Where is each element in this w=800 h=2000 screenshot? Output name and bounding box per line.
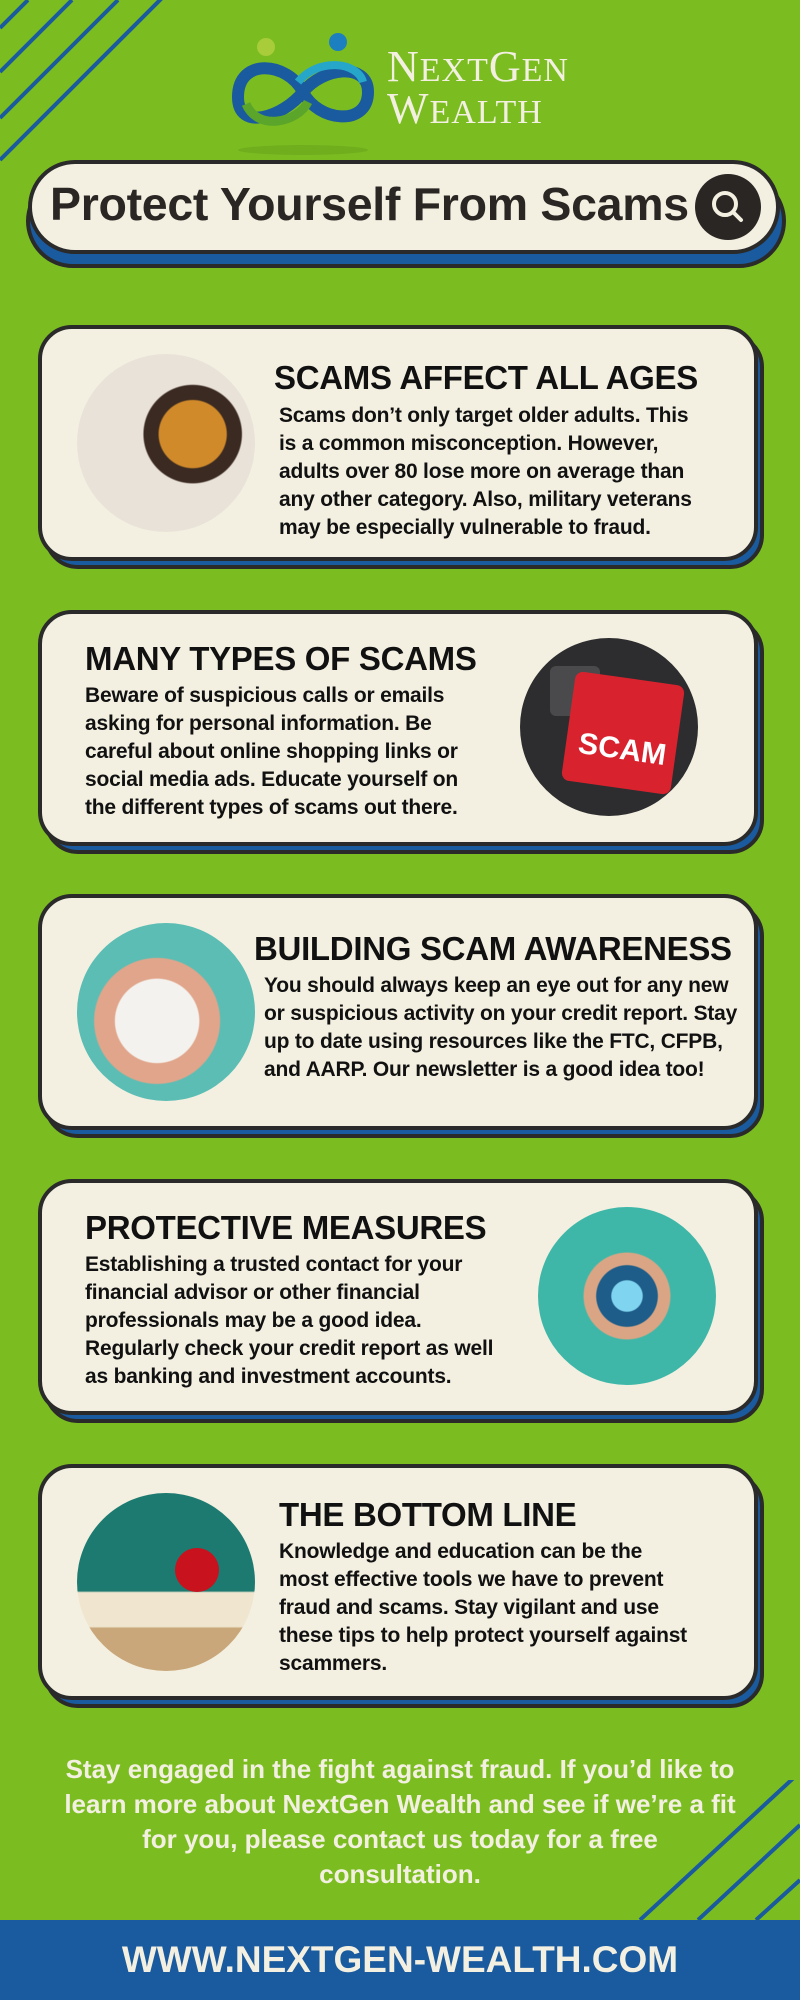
photo: hands with lock (538, 1207, 716, 1385)
title search bar (26, 160, 786, 268)
body text: most effective tools we have to prevent (279, 1568, 663, 1591)
body text: Knowledge and education can be the (279, 1540, 642, 1563)
panel: many types of scams (38, 610, 764, 854)
body text: asking for personal information. Be (85, 712, 432, 735)
body text (264, 974, 738, 1081)
photo: SCAM key (520, 638, 698, 816)
body text: careful about online shopping links or (85, 740, 458, 763)
body text: fraud and scams. Stay vigilant and use (279, 1596, 659, 1619)
title: Protect Yourself From Scams (50, 178, 689, 230)
photo: hands with head (77, 923, 255, 1101)
body text: financial advisor or other financial (85, 1281, 420, 1304)
call to action text: learn more about NextGen Wealth and see if we’re a fit (64, 1789, 736, 1819)
body text: Regularly check your credit report as well (85, 1337, 493, 1360)
body text: You should always keep an eye out for any new (264, 974, 728, 997)
icon: search (695, 174, 761, 240)
footer website band (0, 1920, 800, 2000)
icon: infinity logo (232, 33, 374, 155)
body text: as banking and investment accounts. (85, 1365, 451, 1388)
body text: or suspicious activity on your credit report. Stay (264, 1002, 737, 1025)
body text: these tips to help protect yourself against (279, 1624, 687, 1647)
body text (279, 404, 692, 539)
body text: Scams don’t only target older adults. This (279, 404, 688, 427)
body text: social media ads. Educate yourself on (85, 768, 458, 791)
call to action text: Stay engaged in the fight against fraud. If you’d like to (66, 1754, 734, 1784)
photo: SCAM key: SCAM (576, 727, 668, 772)
body text (85, 684, 458, 819)
body text: is a common misconception. However, (279, 432, 658, 455)
body text (279, 1540, 687, 1675)
logo (232, 33, 569, 155)
body text: may be especially vulnerable to fraud. (279, 516, 651, 539)
heading: SCAMS AFFECT ALL AGES (274, 359, 698, 396)
heading: THE BOTTOM LINE (279, 1496, 576, 1533)
body text: professionals may be a good idea. (85, 1309, 422, 1332)
call to action text: for you, please contact us today for a free (142, 1824, 658, 1854)
logo text: WEALTH (387, 84, 543, 133)
panel: the bottom line (38, 1464, 764, 1708)
heading: MANY TYPES OF SCAMS (85, 640, 477, 677)
decorative stripes top-left (0, 0, 163, 162)
panel: protective measures (38, 1179, 764, 1423)
body text: adults over 80 lose more on average than (279, 460, 684, 483)
photo: books and apple (77, 1493, 255, 1671)
body text: scammers. (279, 1652, 387, 1675)
call to action text: consultation. (319, 1859, 481, 1889)
photo: woman with laptop (77, 354, 255, 532)
body text: Establishing a trusted contact for your (85, 1253, 462, 1276)
body text: and AARP. Our newsletter is a good idea too! (264, 1058, 704, 1081)
body text: up to date using resources like the FTC, CFPB, (264, 1030, 723, 1053)
decorative stripes bottom-right (638, 1780, 800, 1920)
body text: any other category. Also, military veterans (279, 488, 692, 511)
body text: Beware of suspicious calls or emails (85, 684, 444, 707)
call to action text (64, 1754, 736, 1889)
body text (85, 1253, 493, 1388)
footer website band: WWW.NEXTGEN-WEALTH.COM (122, 1939, 678, 1980)
panel: building scam awareness (38, 894, 764, 1138)
panel: scams affect all ages (38, 325, 764, 569)
heading: BUILDING SCAM AWARENESS (254, 930, 732, 967)
logo text: NEXTGEN (387, 42, 569, 91)
body text: the different types of scams out there. (85, 796, 458, 819)
heading: PROTECTIVE MEASURES (85, 1209, 486, 1246)
logo text (387, 42, 569, 133)
